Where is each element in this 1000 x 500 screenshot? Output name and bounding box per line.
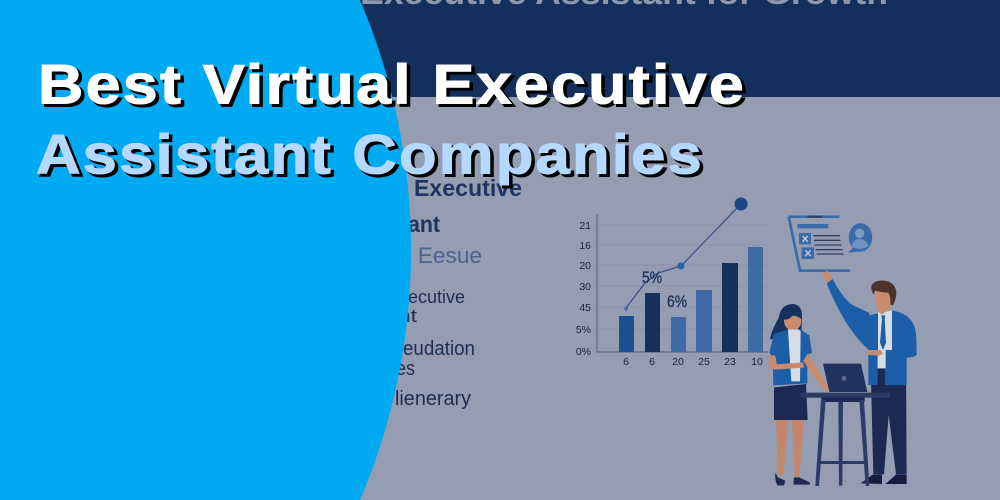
title line 2: Assistant Companies <box>36 122 704 186</box>
chart x axis labels: 25 <box>698 356 710 368</box>
chart axes <box>597 214 768 352</box>
chart y axis labels: 45 <box>579 302 591 314</box>
title <box>36 52 749 188</box>
bar chart <box>576 198 768 368</box>
man upper body <box>822 271 917 350</box>
chart y axis labels: 0% <box>576 346 591 358</box>
chart callouts: 5% <box>642 268 662 287</box>
chart bars <box>619 247 763 352</box>
illustration: woman <box>769 304 829 485</box>
illustration: laptop and standing table <box>801 364 890 486</box>
chart y axis labels: 30 <box>579 281 591 293</box>
illustration: man <box>822 271 917 484</box>
chart x axis labels: 6 <box>649 356 655 368</box>
background text list: Executive <box>414 175 522 201</box>
background text list: lienerary <box>395 388 471 410</box>
title line 2: Assistant Companies <box>39 125 707 188</box>
background text list <box>395 175 522 410</box>
background text list: eudation <box>403 338 475 360</box>
background text list: ant <box>408 211 440 237</box>
man lower body <box>861 340 917 484</box>
chart callouts: 6% <box>667 292 687 311</box>
background text list: ecutive <box>408 287 465 307</box>
chart y axis labels: 21 <box>579 220 591 232</box>
trend line <box>624 198 748 312</box>
standing table <box>801 393 890 486</box>
background text list: r Eesue <box>404 243 482 268</box>
blue circle panel <box>0 0 411 500</box>
background text list: nt <box>398 306 417 326</box>
chart y axis labels <box>576 220 591 358</box>
woman hair and head <box>770 304 802 339</box>
header band <box>0 0 1000 97</box>
chart y axis labels: 5% <box>576 324 591 336</box>
laptop <box>823 364 867 392</box>
background text list: es <box>396 358 415 380</box>
chart x axis labels: 23 <box>724 356 736 368</box>
woman legs and shoes <box>776 420 804 477</box>
woman jacket and clothes <box>769 329 829 420</box>
icon: clipboard with avatar <box>789 216 872 271</box>
title line 1: Best Virtual Executive <box>41 55 749 118</box>
title line 1: Best Virtual Executive <box>38 52 746 116</box>
chart y axis labels: 20 <box>579 260 591 272</box>
chart y axis labels: 16 <box>579 240 591 252</box>
chart x axis labels: 10 <box>751 356 763 368</box>
chart x axis labels: 6 <box>623 356 629 368</box>
chart x axis labels <box>623 356 763 368</box>
chart x axis labels: 20 <box>672 356 684 368</box>
chart callouts <box>642 268 687 311</box>
